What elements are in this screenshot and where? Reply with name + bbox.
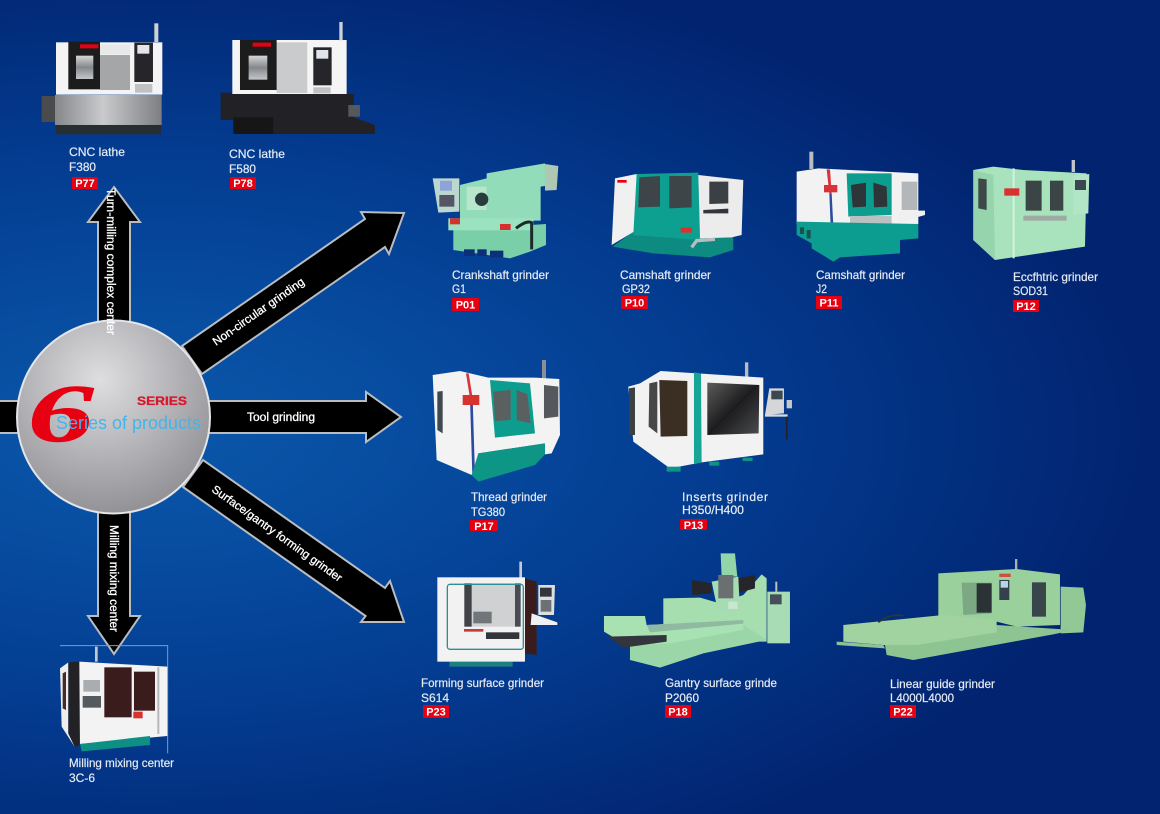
model: GP32 [622, 282, 650, 296]
machine image [437, 562, 557, 667]
page badge [816, 296, 842, 310]
arrow label: non-circular grinding: Non-circular grinding [211, 276, 307, 348]
label text: Linear guide grinder [890, 677, 995, 691]
model: 3C-6 [69, 771, 95, 785]
product: CNC lathe F380 [42, 23, 162, 190]
machine image [628, 362, 792, 472]
label text: Eccfhtric grinder [1013, 270, 1098, 284]
page badge: P18 [668, 706, 688, 718]
label text: Inserts grinder [682, 490, 768, 504]
machine image [837, 559, 1086, 660]
page badge: P23 [426, 706, 446, 718]
machine image [604, 553, 790, 668]
numeral six: 6 [28, 368, 94, 459]
model: SOD31 [1013, 284, 1048, 298]
label text: Milling mixing center [69, 756, 174, 770]
label text: Thread grinder [471, 490, 547, 504]
label text: Gantry surface grinde [665, 676, 777, 690]
model: TG380 [471, 505, 505, 519]
product: Crankshaft grinder G1 [433, 163, 558, 312]
machine image [433, 163, 558, 258]
page badge [680, 519, 707, 532]
machine image [60, 646, 168, 753]
page badge: P12 [1016, 301, 1036, 313]
page badge [452, 298, 479, 312]
label text: Camshaft grinder [620, 268, 711, 282]
product: Camshaft grinder J2 [797, 152, 925, 310]
page badge: P77 [75, 178, 95, 190]
product: Eccentric grinder SOD31 [973, 160, 1098, 313]
model: J2 [816, 282, 827, 296]
page badge: P11 [820, 298, 838, 310]
page badge [230, 177, 256, 190]
product: Thread grinder TG380 [433, 360, 560, 533]
model: S614 [421, 691, 449, 705]
page badge: P17 [474, 521, 494, 533]
page badge [72, 177, 98, 190]
series label: SERIES [137, 396, 187, 408]
model: F380 [69, 160, 96, 174]
arrow: non-circular grinding [182, 212, 404, 374]
machine image [42, 23, 162, 134]
page badge: P01 [456, 300, 475, 312]
label text: Forming surface grinder [421, 676, 544, 690]
product: Linear guide grinder L4000L4000 [837, 559, 1086, 718]
label text: CNC lathe [229, 147, 285, 161]
page badge [423, 705, 449, 718]
central sphere [17, 320, 210, 514]
machine image [797, 152, 925, 262]
arrow label: milling mixing: Milling mixing center [107, 525, 119, 632]
page badge: P22 [893, 706, 913, 718]
page badge: P13 [684, 520, 703, 532]
page badge [1013, 300, 1039, 313]
machine image [433, 360, 560, 482]
arrow: milling mixing down [88, 505, 140, 654]
machine image [612, 173, 743, 257]
page badge: P10 [625, 298, 644, 310]
arrows group [0, 187, 404, 654]
arrow label: surface gantry forming: Surface/gantry forming grinder [209, 484, 344, 585]
arrow: turn-milling up [88, 187, 140, 330]
model: L4000L4000 [890, 691, 954, 705]
model: G1 [452, 282, 466, 296]
arrow label: tool grinding: Tool grinding [247, 412, 315, 424]
model: H350/H400 [682, 503, 744, 517]
machine image [221, 22, 375, 134]
label text: Camshaft grinder [816, 268, 905, 282]
product: Forming surface grinder S614 [421, 562, 557, 718]
arrow: left stub [0, 401, 25, 433]
product: CNC lathe F580 [221, 22, 375, 190]
label text: Crankshaft grinder [452, 268, 549, 282]
page badge [665, 705, 691, 718]
product: Camshaft grinder GP32 [612, 173, 743, 310]
product: Inserts grinder H350/H400 [628, 362, 792, 532]
arrow label: turn-milling: Turn-milling complex center [104, 188, 116, 335]
machine image [973, 160, 1089, 260]
series of products label: Series of products [56, 413, 201, 433]
model: F580 [229, 162, 256, 176]
arrow: surface gantry forming [183, 460, 404, 622]
page badge: P78 [233, 178, 253, 190]
model: P2060 [665, 691, 699, 705]
page badge [470, 520, 498, 533]
page badge [890, 705, 916, 718]
product: Milling mixing center 3C-6 [60, 646, 174, 785]
arrow: tool grinding [200, 392, 401, 442]
product: Gantry surface grinder P2060 [604, 553, 790, 718]
label text: CNC lathe [69, 145, 125, 159]
